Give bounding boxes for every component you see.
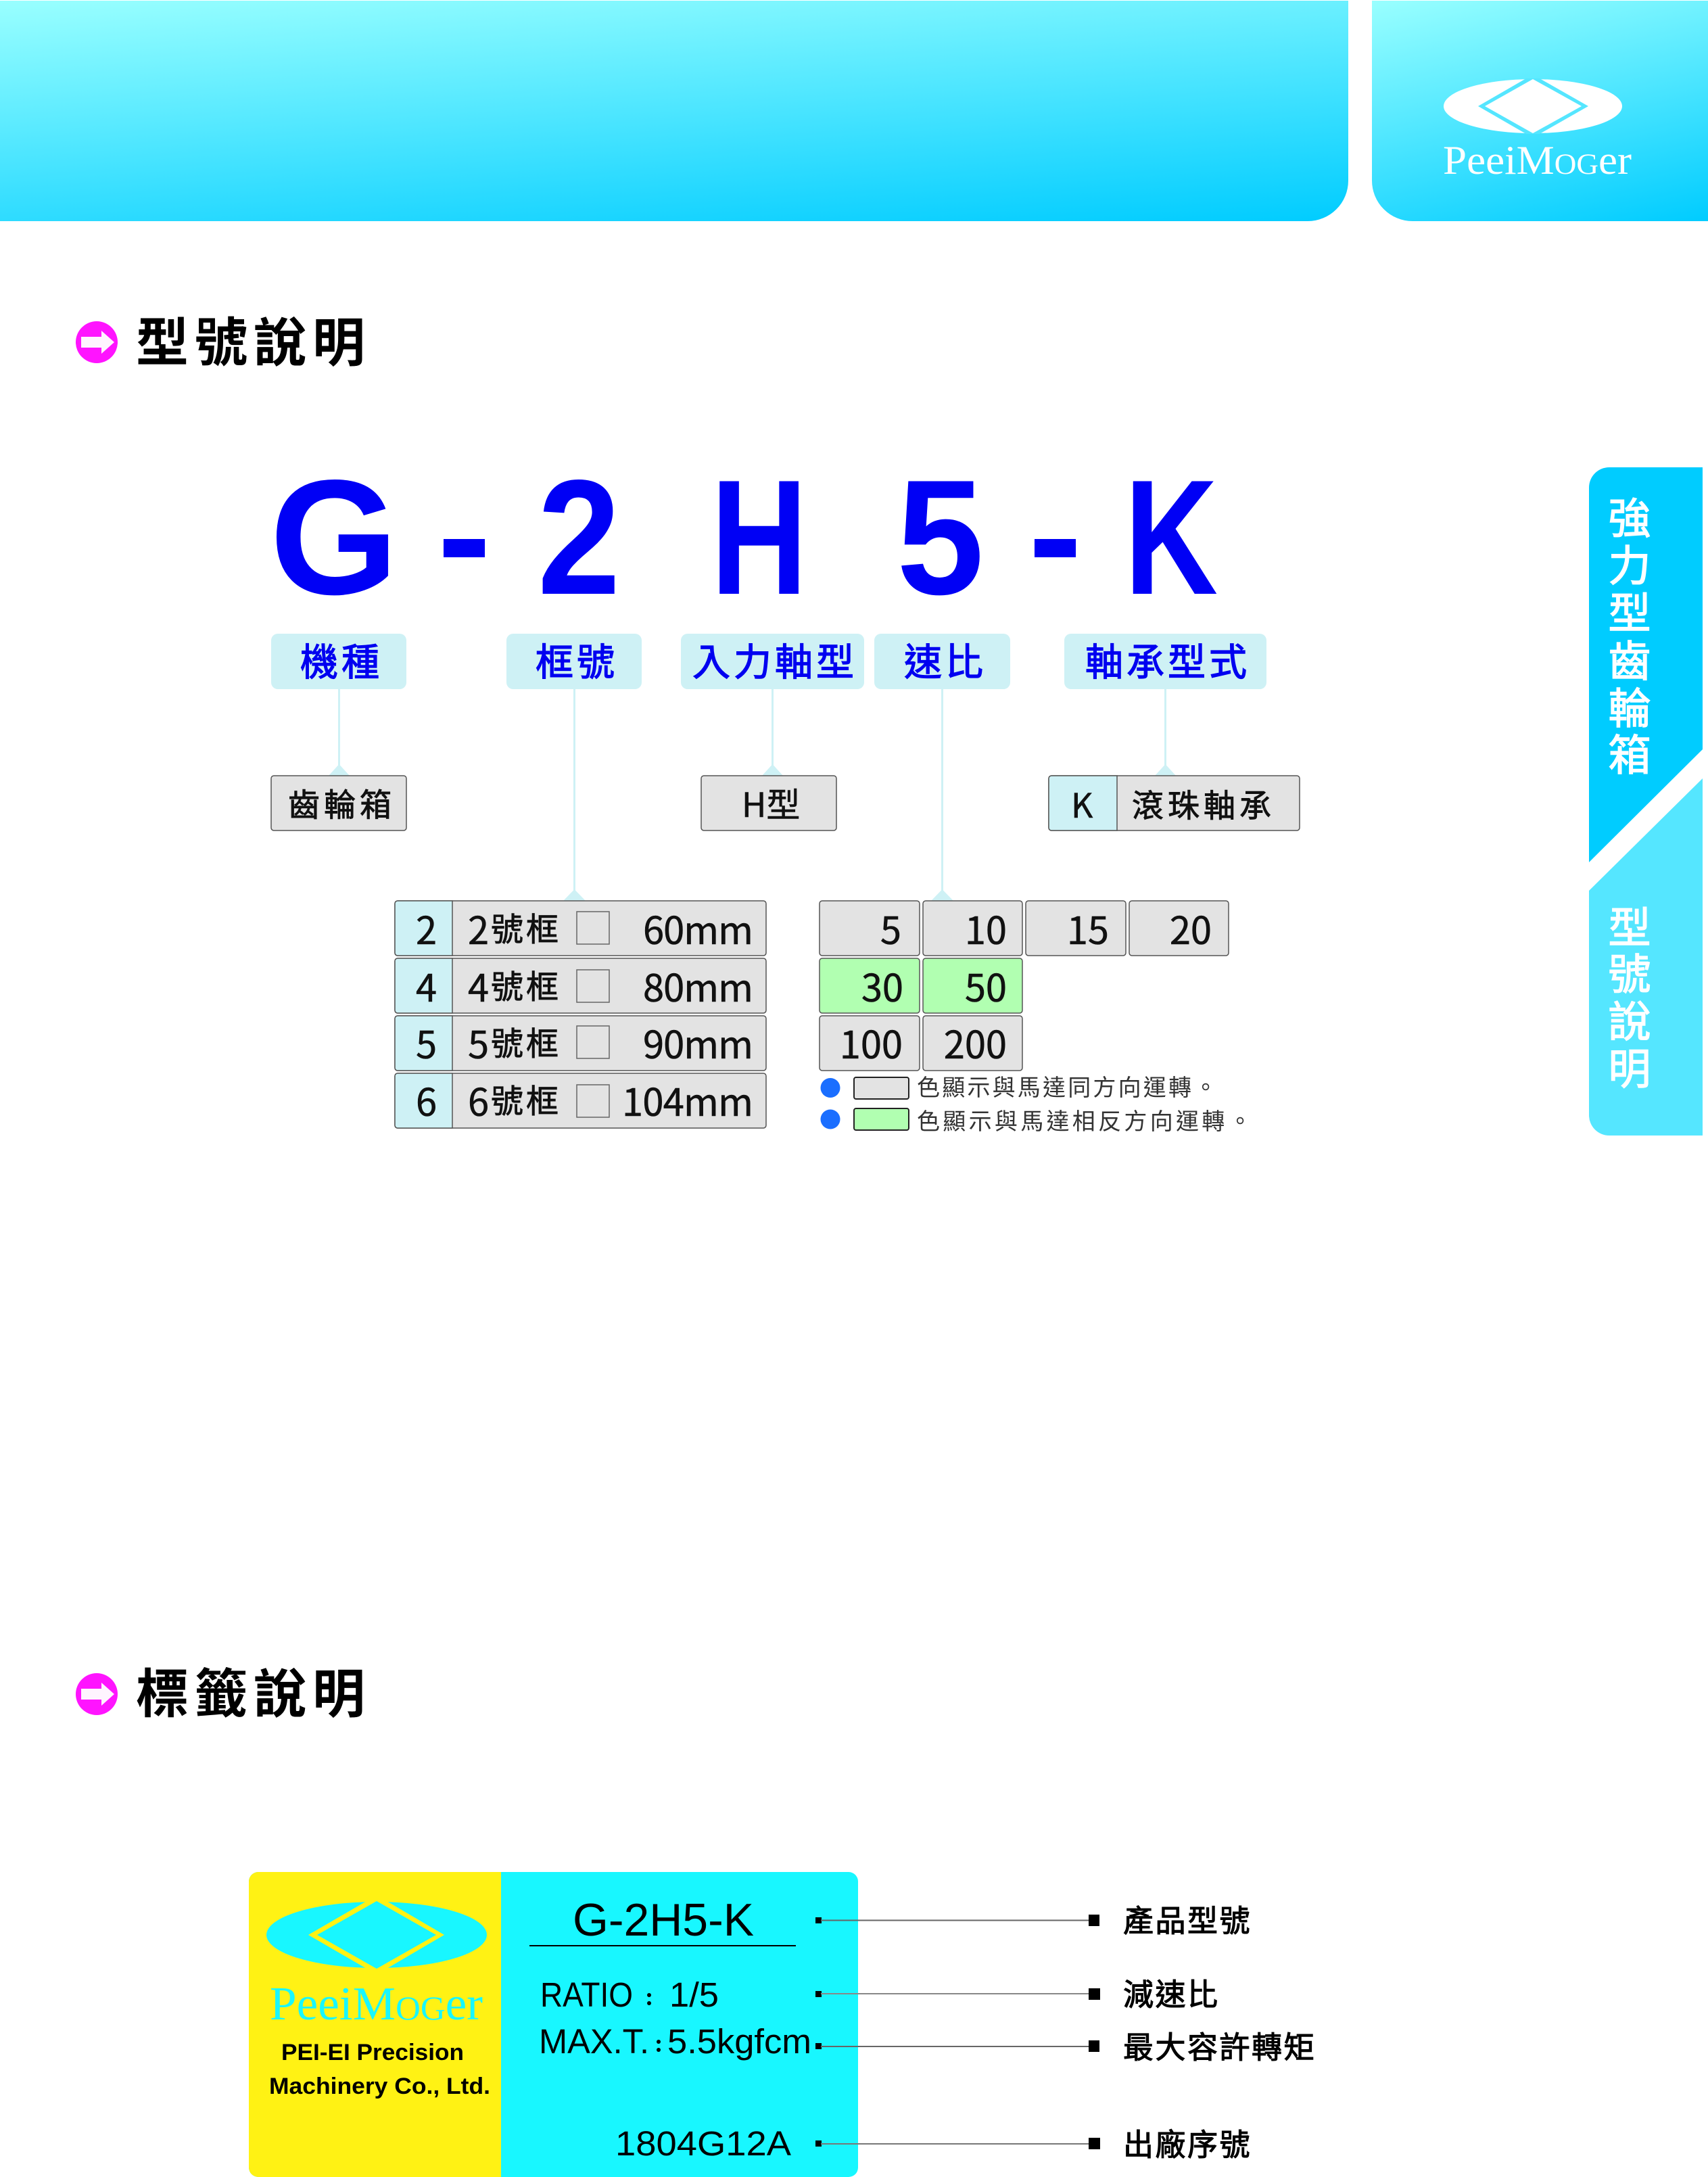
row: frame 5: 5 xyxy=(468,1015,489,1070)
ratio 50: 50 xyxy=(965,958,1007,1013)
ratio 50 xyxy=(923,958,1022,1013)
option: gearbox: 齒輪箱 xyxy=(288,779,396,826)
option: K ball bearing: 滾珠軸承 xyxy=(1132,780,1275,826)
ratio 20: 20 xyxy=(1170,901,1212,956)
option: K ball bearing xyxy=(1049,776,1300,830)
plate yellow side xyxy=(249,1872,501,2177)
header banner xyxy=(0,1,1348,221)
plate wordmark: PeeiMOGer xyxy=(270,1978,483,2030)
plate logo emblem xyxy=(266,1900,487,1969)
logo panel background xyxy=(1372,1,1708,221)
side tab: product category xyxy=(1589,467,1703,862)
header logo panel xyxy=(1372,1,1708,221)
model code: large letters: G xyxy=(270,446,398,629)
label: frame number xyxy=(506,632,642,689)
section heading: model description xyxy=(76,301,371,377)
plate cyan side xyxy=(249,1872,858,2177)
option: K ball bearing: K xyxy=(1071,779,1093,828)
hyphen one xyxy=(444,539,485,557)
side tab: product category: 箱 xyxy=(1608,722,1651,783)
logo emblem xyxy=(1444,78,1622,134)
frame size table xyxy=(395,901,766,1128)
side tab: model description xyxy=(1589,778,1703,1136)
legend: same direction xyxy=(821,1069,1217,1102)
heading text: 標籤說明 xyxy=(136,1652,371,1728)
ratio 15: 15 xyxy=(1067,901,1109,956)
max torque line: 5.5kgfcm xyxy=(667,2022,811,2061)
icon: magenta arrow xyxy=(76,321,118,363)
section heading: label description xyxy=(76,1652,371,1728)
side tab: product category: 力 xyxy=(1608,532,1651,594)
callout: product model: 產品型號 xyxy=(1123,1896,1252,1940)
side tab: product category: 強 xyxy=(1608,485,1651,546)
row: frame 2 xyxy=(395,901,766,956)
callout: product model xyxy=(815,1896,1252,1940)
side tab: model description: 型 xyxy=(1608,894,1651,956)
ratio 200 xyxy=(923,1015,1022,1071)
row: frame 5: 5 xyxy=(416,1015,437,1070)
callout: max allowable torque xyxy=(815,2023,1316,2067)
callout: max allowable torque: 最大容許轉矩 xyxy=(1123,2023,1316,2067)
connectors from labels to options xyxy=(329,689,1176,901)
max torque line xyxy=(539,2022,811,2061)
logo wordmark: PeeiMOGer xyxy=(1443,138,1632,183)
row: frame 6: 6 xyxy=(416,1073,437,1127)
row: frame 5: 號框 xyxy=(491,1017,561,1064)
ratio 5: 5 xyxy=(880,901,901,956)
row: frame 6 xyxy=(395,1073,766,1128)
row: frame 6: 號框 xyxy=(491,1075,561,1122)
callout: reduction ratio xyxy=(815,1970,1220,2014)
legend: opposite direction: 色顯示與馬達相反方向運轉 xyxy=(917,1103,1228,1136)
option: gearbox xyxy=(271,776,406,830)
ratio line xyxy=(540,1975,719,2014)
option: H type: H型 xyxy=(742,778,800,827)
label: bearing type: 軸承型式 xyxy=(1085,632,1250,687)
side tab: model description: 號 xyxy=(1608,941,1651,1002)
ratio 10 xyxy=(923,901,1022,956)
row: frame 4: 4 xyxy=(468,958,489,1013)
ratio line: RATIO xyxy=(540,1975,633,2014)
row: frame 4 xyxy=(395,958,766,1013)
side tab: model description: 明 xyxy=(1608,1035,1651,1097)
max torque line: MAX.T. xyxy=(539,2022,649,2061)
letter H: H xyxy=(711,446,807,628)
callout: serial number xyxy=(815,2120,1252,2164)
icon: magenta arrow xyxy=(76,1673,118,1715)
ratio 15 xyxy=(1026,901,1126,956)
heading text: 型號說明 xyxy=(136,301,371,377)
side tab: product category: 型 xyxy=(1608,580,1651,641)
letter K: K xyxy=(1124,446,1218,629)
ratio line: 1/5 xyxy=(669,1975,719,2014)
legend: opposite direction: 。 xyxy=(1229,1103,1252,1136)
label: ratio: 速比 xyxy=(904,632,987,687)
callout: serial number: 出廠序號 xyxy=(1123,2120,1252,2164)
row: frame 4: 號框 xyxy=(491,960,561,1008)
ratio 200: 200 xyxy=(944,1015,1007,1070)
digit 2: 2 xyxy=(538,446,620,629)
row: frame 2: 2 xyxy=(416,901,437,956)
callout: reduction ratio: 減速比 xyxy=(1123,1970,1220,2014)
row: frame 5: 90mm xyxy=(643,1015,753,1070)
side tab: product category: 輪 xyxy=(1608,675,1651,736)
legend: same direction: 色顯示與馬達同方向運轉 xyxy=(917,1069,1193,1102)
row: frame 6: 6 xyxy=(468,1073,489,1127)
company name line one: PEI-EI Precision xyxy=(281,2040,464,2065)
option: H type xyxy=(701,776,836,830)
row: frame 2: 號框 xyxy=(491,903,561,950)
label: machine type xyxy=(271,632,406,689)
model underline xyxy=(529,1945,796,1946)
label: input shaft type: 入力軸型 xyxy=(692,632,857,687)
ratio 10: 10 xyxy=(965,901,1007,956)
ratio 30: 30 xyxy=(861,958,903,1013)
legend: same direction: 。 xyxy=(1194,1069,1217,1102)
side tab: model description: 說 xyxy=(1608,988,1651,1050)
model code: large letters xyxy=(270,446,1218,629)
company name line two: Machinery Co., Ltd. xyxy=(269,2074,490,2099)
row: frame 5 xyxy=(395,1015,766,1071)
ratio 100 xyxy=(820,1015,920,1071)
row: frame 2: 2 xyxy=(468,901,489,956)
row: frame 4: 80mm xyxy=(643,958,753,1013)
row: frame 6: 104mm xyxy=(622,1073,753,1127)
ratio 5 xyxy=(820,901,920,956)
serial number: 1804G12A xyxy=(615,2124,791,2163)
ratio 100: 100 xyxy=(840,1015,903,1070)
label: machine type: 機種 xyxy=(300,632,383,687)
digit 5: 5 xyxy=(897,446,984,629)
product nameplate xyxy=(249,1872,858,2177)
side tab: product category: 齒 xyxy=(1608,628,1651,689)
ratio 20 xyxy=(1129,901,1229,956)
row: frame 2: 60mm xyxy=(643,901,753,956)
label: ratio xyxy=(874,632,1010,689)
ratio grid xyxy=(820,901,1229,1071)
row: frame 4: 4 xyxy=(416,958,437,1013)
ratio 30 xyxy=(820,958,920,1013)
label: frame number: 框號 xyxy=(536,632,618,687)
model number: G-2H5-K xyxy=(573,1894,754,1946)
hyphen two xyxy=(1035,539,1076,557)
